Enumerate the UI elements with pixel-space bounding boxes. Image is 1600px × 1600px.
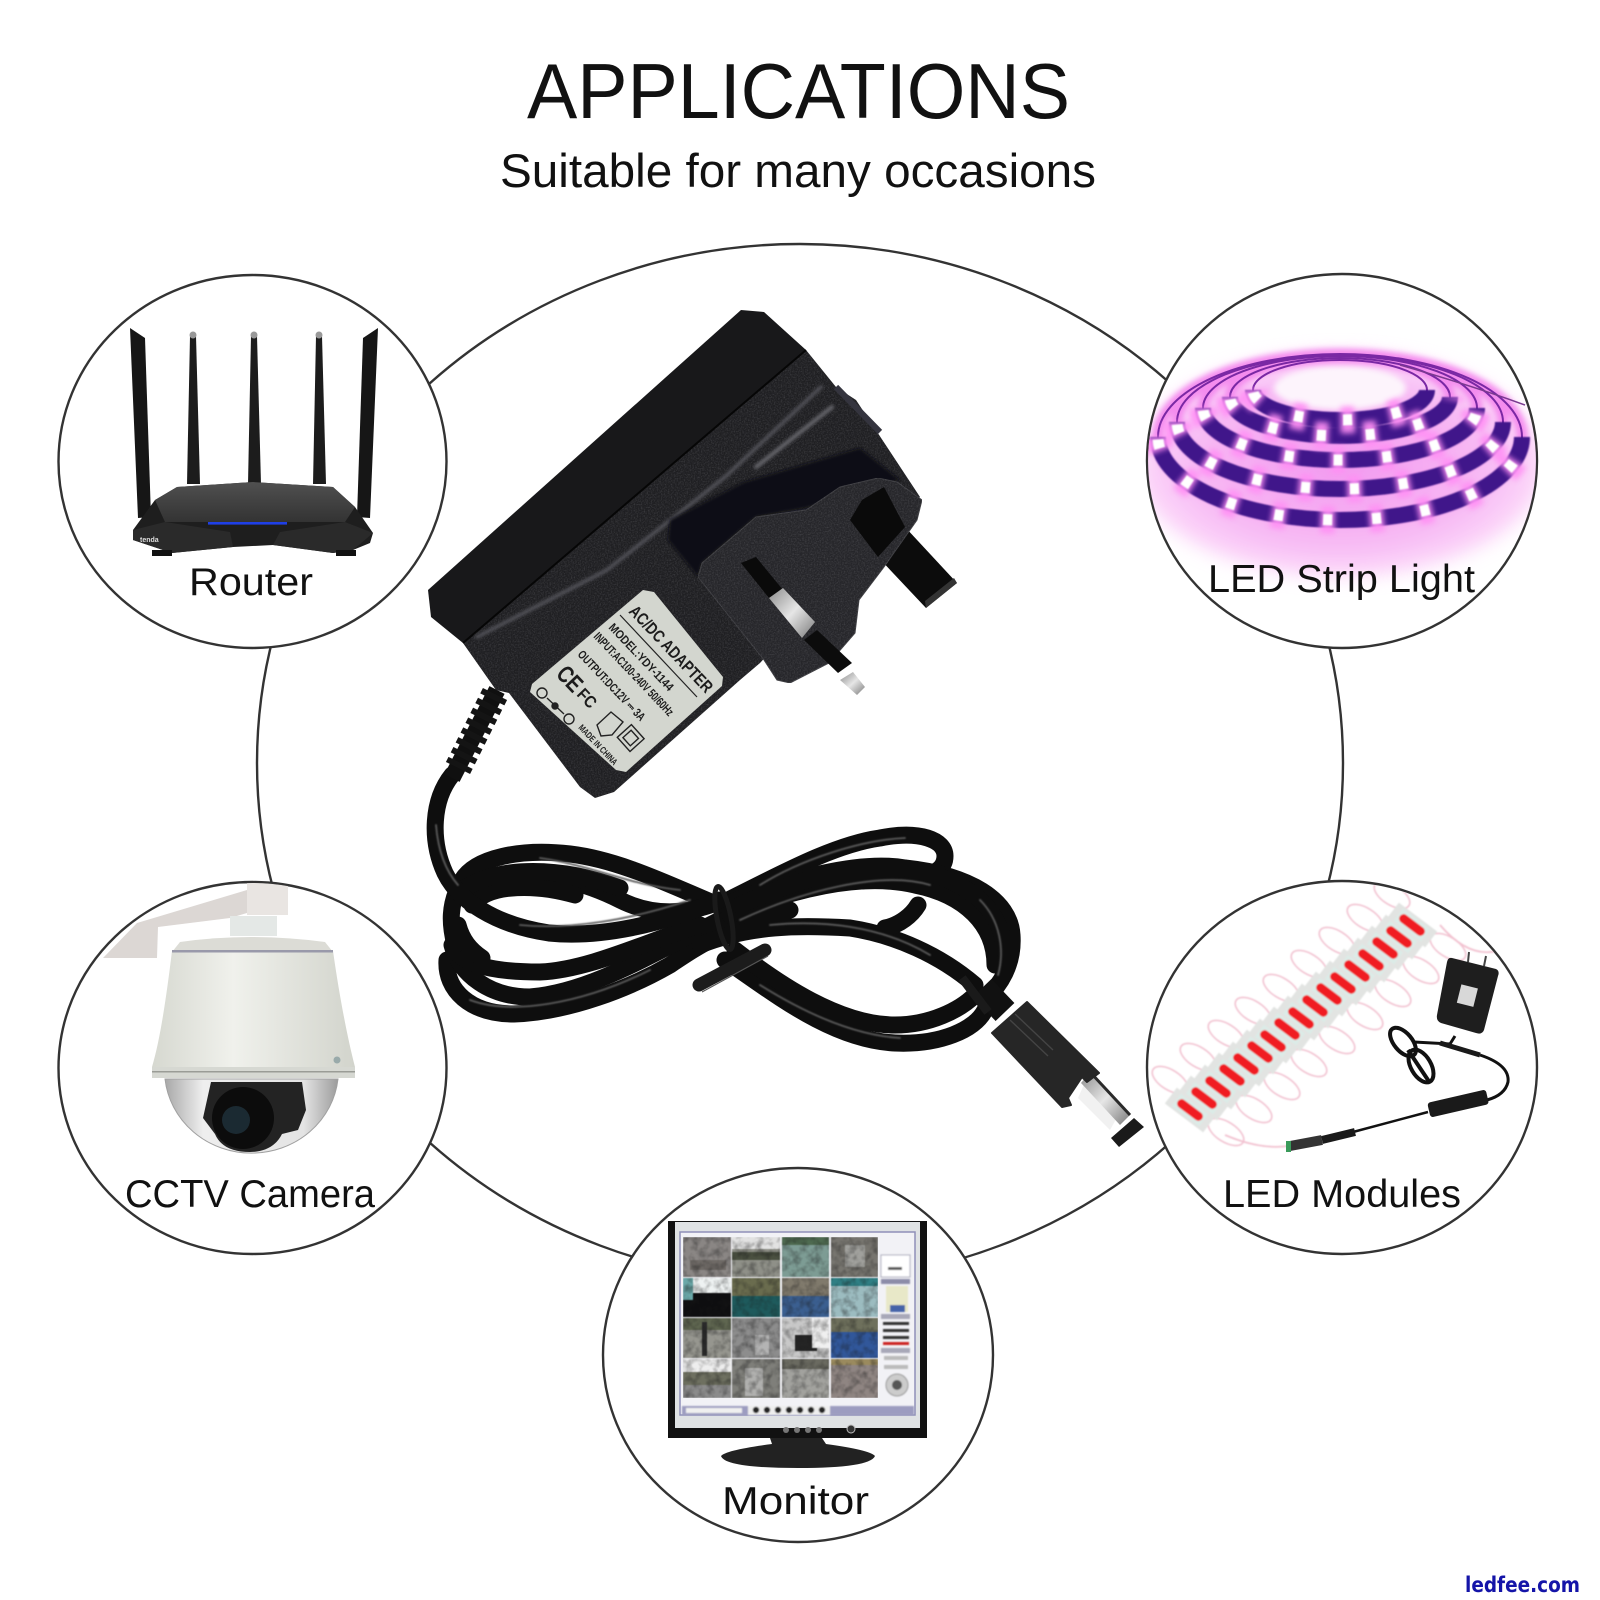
icon: LED module chain xyxy=(1148,876,1500,1151)
title: APPLICATIONS xyxy=(527,47,1070,135)
label: LED strip light: LED Strip Light xyxy=(1208,558,1475,601)
label: router: Router xyxy=(189,561,313,604)
icon: cord strain relief xyxy=(452,690,497,778)
icon: power adapter with switch xyxy=(1286,952,1508,1152)
rating label: MADE IN CHINA xyxy=(577,722,620,767)
adapter rear block xyxy=(428,310,806,643)
label: CCTV camera: CCTV Camera xyxy=(125,1173,375,1216)
icon: router: tenda xyxy=(140,537,159,544)
rating label xyxy=(530,590,723,772)
rating label: CE xyxy=(551,661,588,698)
screen side control panel xyxy=(881,1255,910,1396)
icon: wall adapter xyxy=(428,310,957,798)
live pin xyxy=(741,557,783,598)
icon: LED strip coil xyxy=(1135,353,1545,577)
rating label: INPUT:AC100-240V 50/60Hz xyxy=(591,629,677,719)
screen grid: camera feeds xyxy=(683,1237,878,1398)
screen toolbar xyxy=(682,1406,914,1415)
icon: DC barrel connector xyxy=(962,978,1144,1147)
panel: LED modules xyxy=(1147,876,1537,1254)
rating label: OUTPUT:DC12V ⎓ 3A xyxy=(575,647,648,724)
panel: LED strip light xyxy=(1135,274,1545,648)
earth pin xyxy=(878,527,957,608)
label: monitor: Monitor xyxy=(722,1480,869,1523)
earth pin slot xyxy=(850,487,905,557)
body highlights xyxy=(477,387,832,637)
panel: monitor xyxy=(603,1168,993,1542)
panel: CCTV camera xyxy=(58,882,446,1254)
icon: CCTV monitor xyxy=(668,1221,927,1468)
plug face xyxy=(698,478,922,683)
panel: router xyxy=(58,275,446,648)
plug recess xyxy=(668,448,900,577)
cable clip xyxy=(699,950,765,985)
rating label: FC xyxy=(573,685,601,712)
label: LED modules: LED Modules xyxy=(1223,1173,1461,1216)
large connecting circle xyxy=(257,244,1343,1282)
icon: router xyxy=(130,328,378,556)
adapter textured body xyxy=(463,350,920,798)
icon: dome camera xyxy=(103,883,355,1153)
watermark: ledfee.com xyxy=(1465,1573,1580,1597)
rating label: MODEL:YDY-1144 xyxy=(606,620,677,694)
cable tie band xyxy=(711,885,737,951)
subtitle: Suitable for many occasions xyxy=(500,144,1096,197)
rating label: AC/DC ADAPTER xyxy=(625,602,717,697)
icon: power adapter cable xyxy=(435,775,1012,1043)
